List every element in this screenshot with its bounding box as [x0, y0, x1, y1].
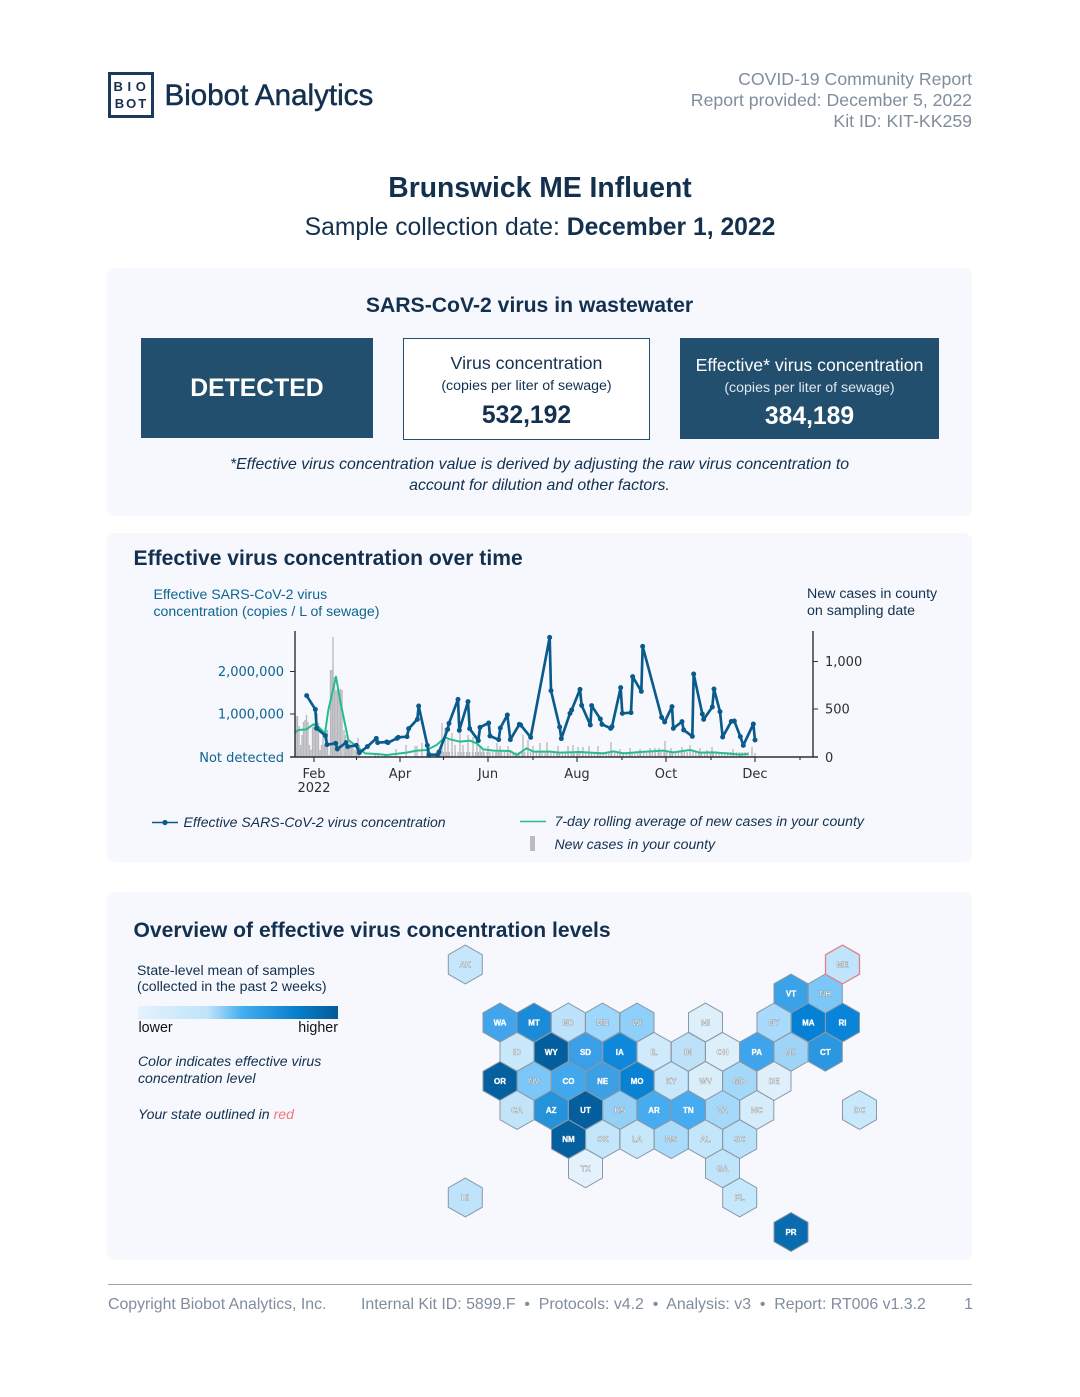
sample collection date: Sample collection date: December 1, 2022: [305, 214, 775, 241]
card: virus concentration: [403, 338, 650, 440]
hex map of states: VT: [786, 990, 796, 998]
state outline note: Your state outlined in red: [138, 1106, 294, 1122]
card: detected: DETECTED: [190, 375, 324, 402]
legend description: [137, 962, 327, 994]
right axis labels: 500: [825, 702, 850, 718]
hex map of states: AK: [460, 960, 471, 970]
hex map of states: IL: [650, 1048, 658, 1057]
footer rule: [108, 1284, 972, 1285]
panel heading: SARS-CoV-2 virus in wastewater: [366, 294, 693, 317]
hex map of states: OH: [716, 1048, 729, 1057]
logo: [108, 72, 373, 118]
card: effective virus concentration: 384,189: [765, 403, 854, 430]
hex map of states: VA: [717, 1106, 728, 1115]
hex map of states: HI: [461, 1194, 469, 1202]
legend markers: [152, 820, 546, 851]
scale label: lower: lower: [138, 1020, 173, 1036]
hex map of states: WY: [545, 1048, 558, 1057]
hex map of states: NJ: [786, 1048, 796, 1057]
card: effective virus concentration: [680, 338, 939, 439]
hex map of states: NE: [597, 1077, 609, 1086]
logo mark: BIO: [114, 79, 150, 94]
report meta: Report provided: December 5, 2022: [691, 90, 972, 110]
card: virus concentration: (copies per liter of sewage): [441, 378, 612, 394]
left axis labels: 2,000,000: [218, 665, 284, 680]
hex map of states: MO: [631, 1077, 643, 1086]
hex map of states: DC: [854, 1106, 865, 1115]
hex map of states: AZ: [546, 1106, 557, 1115]
panel heading: Effective virus concentration over time: [134, 547, 523, 570]
footnote: *Effective virus concentration value is derived by adjusting the raw virus concentration to: [230, 456, 849, 473]
hex map of states: ID: [513, 1048, 521, 1057]
card: virus concentration: 532,192: [482, 402, 571, 429]
hex map of states: WI: [632, 1018, 642, 1028]
hex map of states: NY: [768, 1018, 780, 1028]
scale label: higher: higher: [298, 1020, 338, 1036]
left axis title: [154, 586, 379, 619]
left axis title: Effective SARS-CoV-2 virus: [154, 586, 327, 602]
hex map of states: CA: [511, 1106, 523, 1115]
card: effective virus concentration: Effective* virus concentration: [696, 355, 923, 375]
hex map of states: DE: [768, 1077, 780, 1086]
hex map of states: SD: [580, 1048, 591, 1057]
color note: concentration level: [138, 1070, 256, 1086]
hex map of states: NV: [529, 1077, 540, 1086]
hex map of states: OK: [597, 1135, 609, 1144]
hex map of states: MT: [528, 1018, 540, 1028]
hex map of states: MA: [802, 1018, 815, 1028]
hex map of states: LA: [632, 1135, 643, 1144]
left axis labels: [199, 665, 284, 766]
7-day rolling average line: [295, 677, 748, 755]
panel: SARS-CoV-2 virus in wastewater: [107, 268, 972, 516]
x axis labels: 2022: [297, 781, 331, 796]
hex map of states: WV: [699, 1077, 713, 1086]
right axis labels: 1,000: [825, 655, 862, 670]
panel heading: Overview of effective virus concentration levels: [134, 919, 611, 942]
color note: [138, 1053, 321, 1086]
logo mark: BOT: [115, 96, 148, 110]
legend: virus concentration: Effective SARS-CoV-2 virus concentration: [184, 814, 446, 830]
hex map of states: KS: [614, 1106, 626, 1115]
hex map of states: NH: [820, 990, 831, 998]
title: Brunswick ME Influent: [388, 171, 692, 203]
report meta: [691, 69, 972, 131]
card: effective virus concentration: (copies per liter of sewage): [724, 380, 895, 396]
legend: rolling average: 7-day rolling average of new cases in your county: [554, 813, 864, 829]
x axis labels: Apr: [389, 767, 412, 782]
daily new case bars: [296, 637, 755, 757]
report meta: Kit ID: KIT-KK259: [833, 111, 972, 131]
right axis title: [807, 586, 937, 619]
color scale bar: [138, 1006, 338, 1019]
footer copyright: Copyright Biobot Analytics, Inc.: [108, 1296, 326, 1313]
left axis labels: 1,000,000: [218, 708, 284, 722]
right axis labels: [825, 655, 862, 766]
panel: effective virus concentration over time: [107, 533, 972, 862]
footer report details: Internal Kit ID: 5899.F • Protocols: v4.2 • Analysis: v3 • Report: RT006 v1.3.2: [361, 1296, 926, 1313]
hex map of states: UT: [580, 1106, 591, 1115]
card: virus concentration: Virus concentration: [451, 353, 602, 373]
left axis labels: Not detected: [199, 751, 284, 766]
hex map of states: MI: [701, 1018, 710, 1028]
right axis title: New cases in county: [807, 586, 937, 602]
legend description: State-level mean of samples: [137, 962, 315, 978]
hex map of states: CT: [820, 1048, 831, 1057]
hex map of states: FL: [735, 1194, 745, 1202]
hex map of states: NC: [751, 1106, 763, 1115]
hex map of states: PA: [752, 1048, 762, 1057]
hex map of states: PR: [785, 1228, 797, 1237]
panel: overview of effective virus concentration levels: [107, 892, 972, 1260]
page number: 1: [964, 1296, 973, 1313]
hex map of states: IN: [684, 1048, 693, 1057]
legend description: (collected in the past 2 weeks): [137, 978, 327, 994]
x axis labels: [297, 767, 768, 796]
hex map of states: ND: [563, 1018, 574, 1028]
x axis labels: Oct: [655, 767, 677, 782]
hex map of states: AR: [648, 1106, 660, 1115]
x axis labels: Jun: [477, 767, 498, 782]
logo mark: [108, 72, 154, 118]
hex map of states: ME: [836, 960, 849, 970]
footnote: account for dilution and other factors.: [409, 477, 670, 494]
effective virus concentration line: [307, 637, 755, 755]
right axis title: on sampling date: [807, 603, 915, 619]
card: detected: [141, 338, 373, 438]
hex map of states: MS: [665, 1135, 678, 1144]
hex map of states: GA: [716, 1164, 729, 1173]
right axis labels: 0: [825, 751, 833, 766]
hex map of states: CO: [562, 1077, 574, 1086]
hex map of states: MD: [733, 1077, 746, 1086]
footnote: [230, 456, 849, 494]
x axis labels: Aug: [564, 767, 590, 782]
hex map of states: IA: [616, 1048, 624, 1057]
report meta: COVID-19 Community Report: [738, 69, 972, 89]
hex map of states: AL: [700, 1135, 711, 1144]
logo wordmark: Biobot Analytics: [164, 79, 373, 112]
hex map of states: SC: [734, 1135, 745, 1144]
hex map of states: OR: [494, 1077, 506, 1086]
hex map of states: WA: [494, 1018, 507, 1028]
left axis title: concentration (copies / L of sewage): [154, 603, 379, 619]
hex map of states: KY: [666, 1077, 677, 1086]
x axis labels: Dec: [742, 767, 768, 782]
color note: Color indicates effective virus: [138, 1053, 321, 1069]
x axis labels: Feb: [302, 767, 326, 782]
hex map of states: TX: [580, 1164, 591, 1173]
hex map of states: RI: [838, 1018, 846, 1028]
axes: [290, 631, 818, 762]
hex map of states: TN: [683, 1106, 694, 1115]
legend: new cases: New cases in your county: [554, 836, 715, 852]
hex map of states: MN: [596, 1018, 609, 1028]
hex map of states: NM: [562, 1135, 575, 1144]
